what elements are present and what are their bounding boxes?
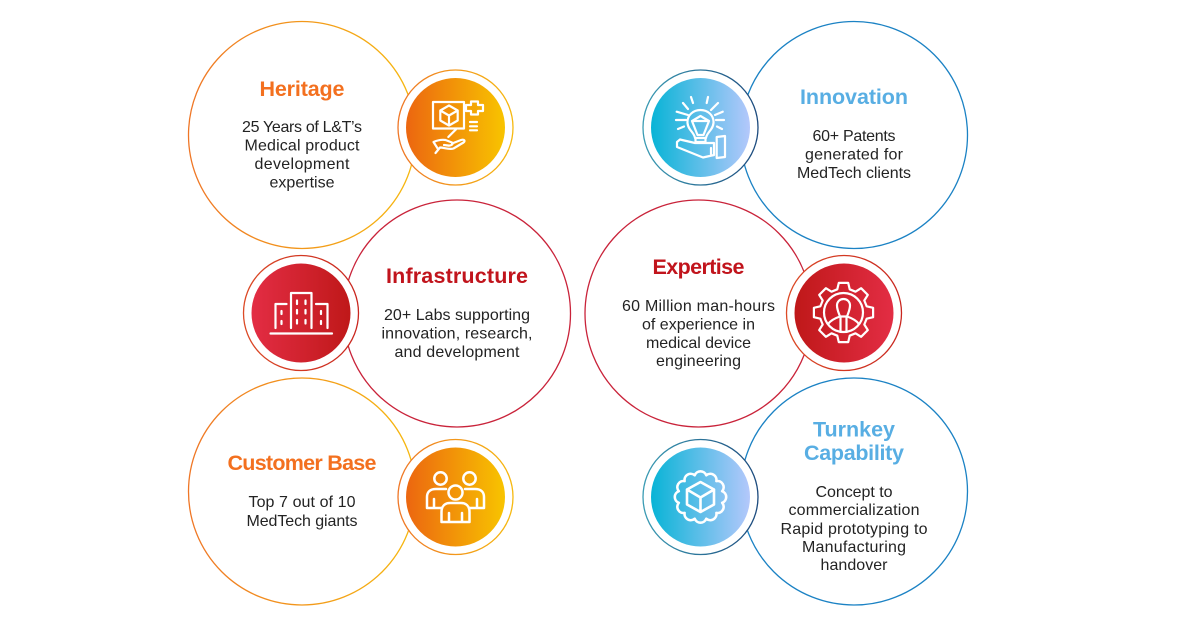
panel: Innovation xyxy=(643,22,968,248)
text block: Infrastructure: innovation, research, xyxy=(382,326,532,342)
text block: Turnkey Capability: Rapid prototyping to xyxy=(780,521,928,538)
text block: Heritage: development xyxy=(254,156,350,173)
outline circle: Expertise xyxy=(585,200,812,427)
text block: Customer Base xyxy=(246,494,358,530)
heading: Infrastructure: Infrastructure xyxy=(386,264,528,288)
panel: Expertise xyxy=(585,200,902,427)
heading: Heritage: Heritage xyxy=(260,77,345,101)
panel: Turnkey Capability xyxy=(643,378,968,605)
heading: Turnkey Capability xyxy=(804,418,904,465)
heading: Turnkey Capability: Capability xyxy=(804,441,904,465)
icon: light bulb in hand xyxy=(643,70,758,185)
text block: Customer Base: Top 7 out of 10 xyxy=(248,494,356,511)
text block: Turnkey Capability xyxy=(780,484,928,574)
text block: Customer Base: MedTech giants xyxy=(246,513,358,530)
text block: Expertise: medical device xyxy=(646,335,751,352)
text block: Expertise: of experience in xyxy=(642,316,755,334)
icon: buildings xyxy=(244,256,358,370)
text block: Heritage: expertise xyxy=(270,174,335,192)
text block: Innovation: generated for xyxy=(805,146,904,164)
text block: Turnkey Capability: handover xyxy=(820,557,888,574)
outline circle: Heritage xyxy=(188,22,416,248)
icon: product in hand with plus xyxy=(398,70,513,185)
text block: Innovation xyxy=(797,128,911,182)
text block: Heritage: 25 Years of L&T’s xyxy=(242,119,362,136)
text block: Infrastructure: and development xyxy=(394,344,520,361)
icon: group of people xyxy=(398,440,513,554)
text block: Innovation: 60+ Patents xyxy=(812,128,896,145)
panel: Customer Base xyxy=(188,378,513,605)
heading: Customer Base: Customer Base xyxy=(228,451,377,475)
heading: Turnkey Capability: Turnkey xyxy=(813,418,895,442)
text block: Expertise: engineering xyxy=(656,353,741,370)
text block: Turnkey Capability: commercialization xyxy=(788,502,920,519)
icon: person in gear xyxy=(786,256,902,370)
panel: Infrastructure xyxy=(244,200,570,427)
text block: Heritage xyxy=(242,119,362,192)
heading: Expertise: Expertise xyxy=(652,255,745,279)
outline circle: Innovation xyxy=(740,22,968,248)
text block: Turnkey Capability: Concept to xyxy=(816,484,893,501)
text block: Heritage: Medical product xyxy=(244,138,360,154)
text block: Turnkey Capability: Manufacturing xyxy=(802,539,906,556)
text block: Expertise: 60 Million man-hours xyxy=(622,298,775,315)
panel: Heritage xyxy=(188,22,513,248)
outline circle: Turnkey Capability xyxy=(740,378,968,605)
text block: Innovation: MedTech clients xyxy=(797,165,911,182)
heading: Innovation: Innovation xyxy=(800,85,908,109)
text block: Expertise xyxy=(622,298,775,370)
outline circle: Infrastructure xyxy=(344,200,570,427)
text block: Infrastructure xyxy=(382,307,532,361)
icon: cube in gear xyxy=(643,440,758,554)
outline circle: Customer Base xyxy=(188,378,416,605)
text block: Infrastructure: 20+ Labs supporting xyxy=(384,307,530,324)
